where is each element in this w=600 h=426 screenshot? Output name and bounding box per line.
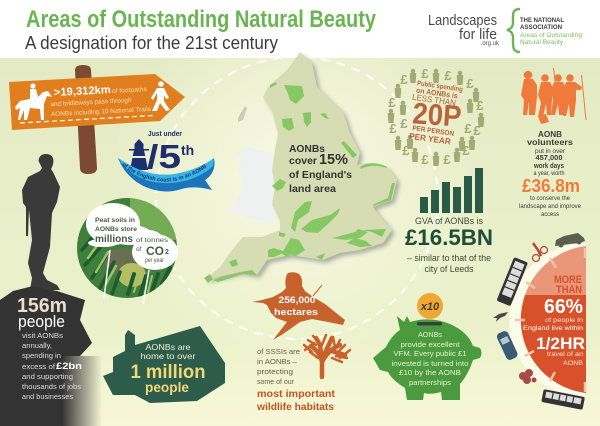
peat text: AONBs store bbox=[95, 226, 137, 233]
spending text: Public spending bbox=[417, 80, 463, 94]
sign text: >19,312km bbox=[54, 84, 111, 99]
pig text: provide excellent bbox=[400, 342, 460, 349]
bar chart: GVA bbox=[420, 168, 483, 213]
peat text: 2 bbox=[165, 249, 169, 256]
peat text: millions bbox=[95, 234, 133, 245]
ring of pound signs and figures: £ bbox=[421, 66, 429, 81]
peat text: of bbox=[136, 246, 142, 253]
logo: National Association bbox=[507, 9, 582, 52]
map caption bbox=[289, 144, 352, 195]
peat text bbox=[95, 217, 169, 264]
house: residents: 1 million bbox=[130, 362, 206, 383]
hiker bbox=[22, 154, 60, 290]
sign text: and bridleways pass through bbox=[50, 97, 132, 108]
sign text bbox=[50, 82, 152, 118]
callout: coast: th bbox=[181, 142, 194, 158]
half circle: travel: travel of an bbox=[547, 351, 583, 358]
ring of pound signs and figures: £ bbox=[388, 95, 396, 110]
ring of pound signs and figures: £ bbox=[402, 143, 410, 158]
half circle: travel: AONB bbox=[563, 360, 583, 367]
dashed circle bbox=[156, 57, 438, 339]
house: residents: home to over bbox=[140, 351, 196, 361]
logo: Landscapes for life: .org.uk bbox=[481, 41, 500, 47]
hiker silhouette on rock bbox=[0, 154, 112, 426]
icon: blue car bbox=[496, 330, 519, 361]
icon: cyclist bbox=[532, 243, 548, 262]
volunteers text: volunteers bbox=[527, 137, 573, 147]
half circle: travel: of people in bbox=[545, 317, 583, 324]
sign board bbox=[9, 74, 185, 130]
sign text: AONBs including 10 National Trails bbox=[51, 106, 152, 118]
SSSI text bbox=[256, 347, 336, 413]
title: Areas of Outstanding Natural Beauty bbox=[26, 6, 377, 33]
signpost bbox=[9, 65, 185, 174]
hiker silhouette on rock: and businesses bbox=[22, 392, 73, 401]
pig text: AONBs bbox=[418, 332, 443, 339]
ring of pound signs and figures: £ bbox=[473, 123, 481, 138]
half circle: travel: MORE bbox=[554, 274, 582, 286]
icon: flower bush bbox=[519, 369, 536, 384]
vegetation bbox=[130, 198, 176, 240]
post bbox=[75, 65, 97, 174]
travel ticks bbox=[515, 248, 585, 392]
logo: Landscapes for life bbox=[428, 12, 500, 47]
public spending circle: 20P bbox=[411, 97, 463, 134]
ring of pound signs and figures: £ bbox=[421, 152, 429, 167]
spending text: LESS THAN bbox=[412, 92, 457, 108]
pig text bbox=[392, 332, 469, 387]
pig text: VFM. Every public £1 bbox=[394, 351, 467, 358]
ring of pound signs and figures: £ bbox=[389, 121, 397, 136]
icon: lighthouse bbox=[129, 139, 149, 170]
hiker silhouette on rock: thousands of jobs bbox=[22, 382, 81, 391]
map caption: AONBs bbox=[289, 144, 325, 155]
moth: hectares bbox=[252, 272, 345, 340]
GVA text bbox=[405, 216, 493, 275]
volunteers text: £36.8m bbox=[522, 176, 580, 196]
ring of pound signs and figures: £ bbox=[400, 116, 408, 131]
SSSI text: wildlife habitats bbox=[256, 402, 334, 413]
white splash bbox=[86, 203, 178, 270]
hiker silhouette on rock: excess of bbox=[22, 362, 56, 371]
slot bbox=[417, 322, 442, 326]
SSSI text: of SSSIs are bbox=[257, 347, 300, 356]
volunteers text: to conserve the bbox=[530, 195, 570, 202]
icon: bus bbox=[497, 257, 528, 306]
callout: coast: /5 bbox=[147, 138, 181, 175]
AONB patches bbox=[204, 82, 395, 283]
public spending circle bbox=[388, 66, 484, 167]
house: residents bbox=[103, 326, 225, 403]
spending text bbox=[412, 80, 463, 108]
ring of pound signs and figures: £ bbox=[443, 152, 451, 167]
volunteers text: landscape and improve bbox=[519, 203, 581, 210]
icon: tree bbox=[304, 335, 350, 377]
public spending circle: PER PERSON bbox=[412, 125, 454, 138]
icon: volunteers bbox=[521, 68, 586, 124]
logo: Landscapes for life: Landscapes bbox=[428, 12, 497, 29]
moth: hectares: hectares bbox=[274, 307, 318, 318]
volunteers text: 457,000 bbox=[536, 155, 563, 162]
callout: coast: of the English coast is in an AONB bbox=[122, 163, 206, 182]
peat text: CO bbox=[146, 244, 164, 258]
logo: National Association: Natural Beauty bbox=[520, 39, 564, 46]
coin bbox=[417, 293, 443, 319]
volunteers text: put in over bbox=[535, 148, 566, 155]
pig text: invested is turned into bbox=[392, 361, 469, 368]
icon: bus 2 bbox=[541, 389, 585, 410]
map of England and Wales bbox=[204, 52, 400, 283]
sign text: of footpaths bbox=[112, 86, 148, 95]
volunteers text bbox=[519, 129, 581, 218]
hiker silhouette on rock: £2bn bbox=[56, 361, 82, 372]
isle of man bbox=[238, 106, 247, 122]
GVA text: – similar to that of the bbox=[407, 253, 491, 264]
ring of pound signs and figures: £ bbox=[444, 68, 452, 83]
ring of pound signs and figures: £ bbox=[400, 72, 408, 87]
hiker silhouette on rock: people bbox=[18, 312, 65, 331]
ring of pound signs and figures: £ bbox=[476, 98, 484, 113]
volunteers text: work days bbox=[533, 163, 564, 170]
moth: hectares: 256,000 bbox=[278, 295, 316, 306]
SSSI text: in AONBs – bbox=[257, 357, 298, 366]
icon: running animal bbox=[493, 312, 508, 322]
map caption: of England's bbox=[289, 170, 352, 181]
logo: Landscapes for life: for life bbox=[459, 26, 497, 43]
SSSI text: most important bbox=[257, 389, 336, 400]
hiker silhouette on rock: and supporting bbox=[22, 372, 73, 381]
icon: car bbox=[555, 233, 585, 248]
ring of pound signs and figures: £ bbox=[462, 143, 470, 158]
icon: walker bbox=[151, 81, 170, 111]
volunteers text: access bbox=[541, 211, 560, 218]
ring of pound signs and figures: £ bbox=[466, 76, 474, 91]
hiker silhouette on rock: visit AONBs bbox=[22, 331, 63, 340]
hiker silhouette on rock: annually, bbox=[22, 341, 52, 350]
map caption: cover bbox=[289, 156, 317, 167]
volunteers text: AONB bbox=[538, 129, 562, 139]
peat text: of tonnes bbox=[136, 237, 169, 244]
half circle: travel: England live within bbox=[523, 325, 583, 332]
half circle: travel: 1/2HR bbox=[536, 334, 585, 353]
peat text: per year bbox=[145, 257, 165, 264]
rock bbox=[0, 286, 92, 356]
logo: National Association: Areas of Outstanding bbox=[520, 32, 582, 39]
house: residents: AONBs are bbox=[146, 342, 191, 352]
half circle: travel bbox=[509, 243, 586, 397]
subtitle: A designation for the 21st century bbox=[25, 33, 278, 53]
callout: coast: Just under bbox=[148, 131, 182, 138]
public spending circle: PER YEAR bbox=[409, 131, 452, 147]
peat circle bbox=[77, 195, 180, 304]
SSSI text: protecting bbox=[257, 367, 293, 376]
pig body bbox=[373, 316, 482, 400]
piggy bank: value for money bbox=[373, 293, 482, 400]
wave bbox=[118, 158, 215, 191]
pig text: partnerships bbox=[409, 380, 452, 387]
SSSI text: some of our bbox=[257, 377, 294, 386]
piggy bank: value for money: x10 bbox=[420, 301, 440, 313]
logo: National Association: THE NATIONAL bbox=[520, 17, 564, 24]
Wales bbox=[220, 147, 280, 223]
rock text: 156m bbox=[17, 295, 67, 317]
logo: National Association: ASSOCIATION bbox=[520, 24, 562, 31]
GVA text: city of Leeds bbox=[424, 264, 474, 275]
callout: coast bbox=[118, 130, 214, 192]
hiker silhouette on rock: spending in bbox=[22, 351, 61, 360]
map caption: land area bbox=[289, 184, 336, 195]
ring of pound signs and figures bbox=[388, 66, 484, 167]
GVA text: GVA of AONBs is bbox=[415, 216, 483, 227]
GVA text: £16.5BN bbox=[405, 225, 493, 250]
pig text: £10 by the AONB bbox=[399, 370, 461, 377]
icon: horse rider bbox=[15, 83, 52, 120]
England bbox=[205, 52, 397, 280]
half circle: travel: THAN bbox=[556, 284, 582, 296]
ring of pound signs and figures: £ bbox=[464, 121, 472, 136]
volunteers text: a year, worth bbox=[534, 170, 565, 177]
map caption: 15% bbox=[319, 151, 348, 168]
spending text: on AONBs is bbox=[416, 86, 458, 100]
peat text: Peat soils in bbox=[95, 217, 135, 224]
half circle: travel: 66% bbox=[544, 296, 583, 318]
house: residents: people bbox=[145, 379, 189, 395]
